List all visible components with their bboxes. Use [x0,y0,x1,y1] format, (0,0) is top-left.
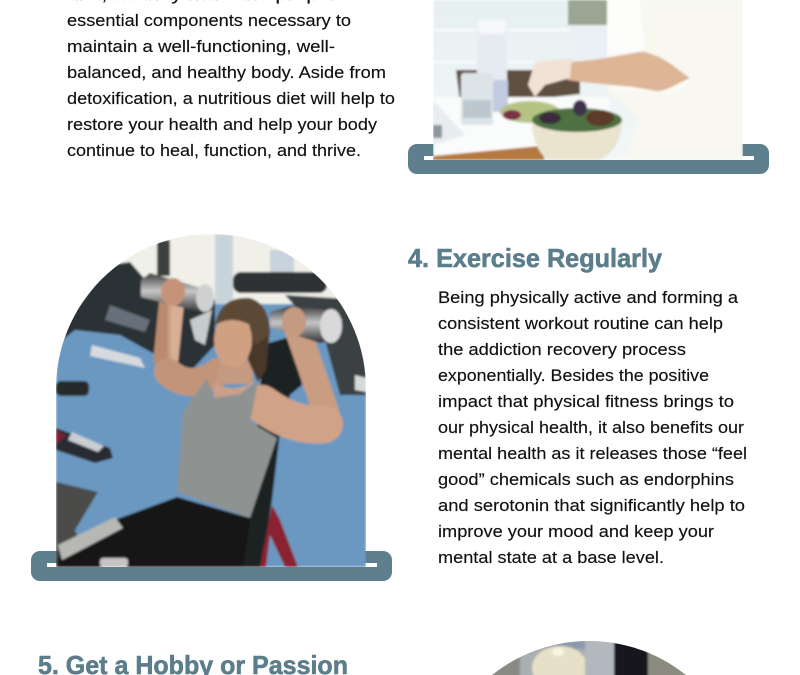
head [214,313,252,367]
salad [532,108,622,132]
bowl [532,122,622,160]
text block: exercise paragraph: Being physically active and forming a [438,288,739,307]
right dumbbell [270,306,342,343]
left dumbbell [141,273,214,313]
photo: man lifting dumbbells in arch [56,234,366,567]
text block: exercise paragraph: the addiction recovery process [438,340,686,359]
far arm [296,325,326,412]
text block: exercise paragraph: our physical health, it also benefits our [438,418,744,437]
photo: person preparing a salad [433,0,743,160]
counter [433,97,610,155]
plant [568,0,608,25]
text block: exercise paragraph: impact that physical fitness brings to [438,392,734,411]
plate of salad [500,101,560,123]
bench [240,335,302,567]
text block: healthy diet paragraph: essential components necessary to [67,11,351,30]
neck [216,360,253,384]
text block: exercise paragraph: consistent workout routine can help [438,314,723,333]
text block: exercise paragraph: exponentially. Besides the positive [438,366,709,385]
text block: healthy diet paragraph: maintain a well-functioning, well- [67,37,335,56]
water jug [475,60,509,82]
back equipment right [233,272,327,293]
lower-left dumbbell rack [58,517,123,560]
hair back [248,320,270,382]
shelf: under salad photo [408,144,769,174]
text block: exercise paragraph: mental state at a base level. [438,548,664,567]
wood edge [433,146,545,160]
window backdrop [80,234,338,306]
photo: top of next arch image [492,641,686,675]
text block: healthy diet paragraph: continue to heal, function, and thrive. [67,141,361,160]
text block: exercise paragraph [438,288,747,567]
text block: exercise paragraph: improve your mood and keep your [438,522,714,541]
left floor equipment [56,381,89,396]
text block: healthy diet paragraph: restore your health and help your body [67,115,378,134]
shirt [608,0,743,121]
text block: exercise paragraph: and serotonin that significantly help to [438,496,745,515]
text block: exercise paragraph: good” chemicals such as endorphins [438,470,734,489]
shelf: under gym photo [31,551,392,581]
heading: 4. Exercise Regularly: 4. Exercise Regularly [408,243,663,273]
arm [560,52,690,91]
red bands [260,505,298,567]
text block: exercise paragraph: mental health as it releases those “feel [438,444,747,463]
mug [578,26,608,58]
text block: healthy diet paragraph: detoxification, a nutritious diet will help to [67,89,395,108]
text block: healthy diet paragraph [67,0,395,160]
dark machines left [56,262,215,372]
glass [461,73,493,125]
pants [57,497,250,567]
tank top [177,378,277,518]
wood box [454,68,582,98]
near arm [166,298,172,358]
text block: healthy diet paragraph: balanced, and healthy body. Aside from [67,63,386,82]
